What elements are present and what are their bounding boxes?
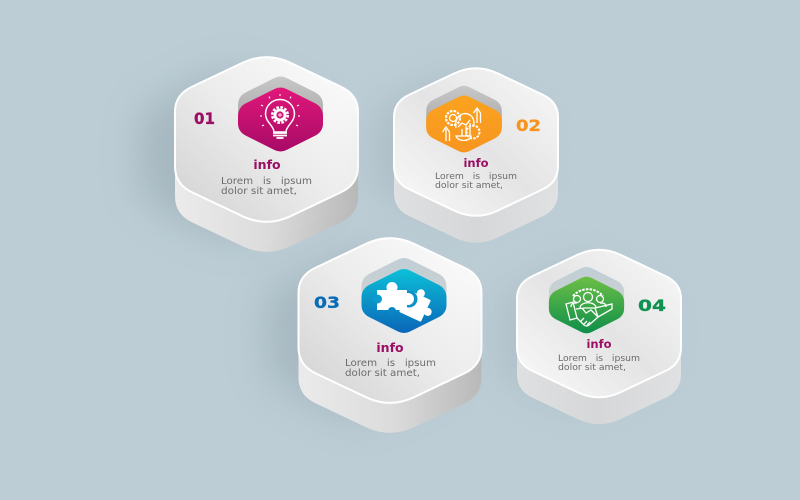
icon: handshake with team and gear [566,289,612,326]
shadow 4 [498,261,662,409]
body text 4 [558,354,640,373]
card 4 [498,250,681,424]
icon: gears and growth arrows [442,108,480,141]
number 03: 03 [314,293,340,312]
body text 1: dolor sit amet, [221,186,297,197]
shadow 3 [266,253,450,417]
window 2 [426,86,502,152]
card 2 [373,68,558,243]
window 3 [362,258,446,333]
body text 2 [435,172,517,191]
window 1 [238,76,323,152]
body text 2: dolor sit amet, [435,181,503,191]
side wall 4 [517,324,681,424]
top face 1 [175,57,358,222]
body text 4: Lorem is ipsum [558,354,640,364]
card 3 [266,238,482,433]
body text 3: dolor sit amet, [345,368,420,379]
icon: puzzle pieces [373,282,439,324]
heading info 4: info [586,337,612,351]
body text 1 [221,176,312,197]
body text 1: Lorem is ipsum [221,176,312,187]
number 01: 01 [194,109,215,128]
window 4 [549,267,624,333]
top face 4 [517,250,681,397]
heading info 1: info [253,157,281,172]
heading info 2: info [463,156,489,170]
top face 2 [394,68,558,216]
body text 3: Lorem is ipsum [345,358,436,369]
number 02: 02 [516,116,541,135]
body text 3 [345,358,436,379]
shadow 2 [373,76,537,224]
top face 3 [298,238,482,403]
number 04: 04 [638,296,666,315]
icon: light bulb with gear [260,94,300,138]
heading info 3: info [376,340,404,355]
side wall 3 [298,320,482,433]
body text 4: dolor sit amet, [558,363,626,373]
body text 2: Lorem is ipsum [435,172,517,182]
side wall 2 [394,142,558,243]
card 1 [140,57,358,252]
shadow 1 [140,73,324,237]
side wall 1 [175,140,358,252]
